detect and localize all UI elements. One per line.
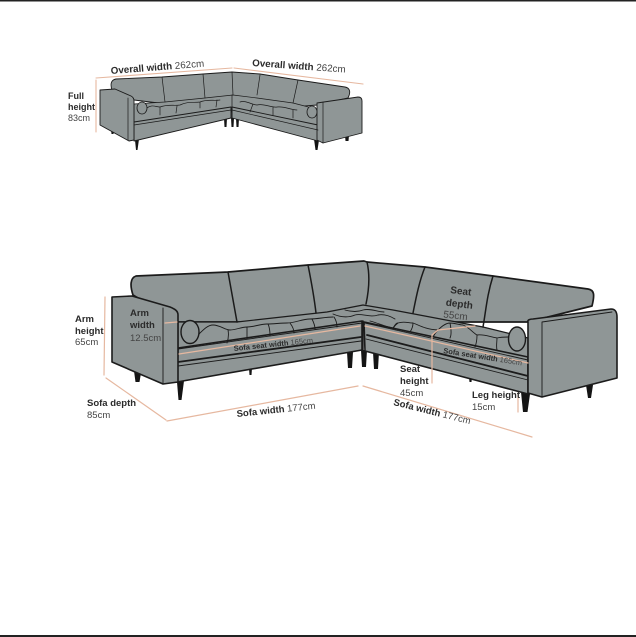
label: seat height: 45cm (400, 388, 423, 399)
label: arm height: height (75, 326, 104, 337)
small bolster right (307, 106, 317, 118)
right arm inner line (542, 312, 612, 396)
legs (111, 118, 349, 150)
left arm (100, 89, 134, 141)
label: leg height: Leg height (472, 390, 521, 401)
seat tufting (198, 309, 508, 350)
right arm (528, 309, 617, 397)
front piping and seams (178, 321, 528, 380)
label: sofa depth: Sofa depth (87, 398, 136, 409)
label: seat width left: Sofa seat width 165cm (233, 336, 313, 353)
cushion and tuft lines (128, 72, 323, 143)
label: arm width: 12.5cm (130, 333, 161, 344)
top border (0, 0, 636, 2)
back cushion seams (228, 262, 493, 327)
label: arm height: 65cm (75, 337, 98, 348)
label: overall width right: Overall width 262cm (252, 58, 346, 76)
seat cushions (178, 305, 528, 360)
label: arm height: Arm (75, 314, 94, 325)
label: arm width: Arm (130, 308, 149, 319)
small sofa width dimension right (234, 68, 363, 84)
label: seat height: height (400, 376, 429, 387)
legs (134, 350, 593, 412)
right arm (317, 97, 362, 143)
dimension: arm width (165, 322, 177, 323)
large corner sofa illustration (112, 261, 617, 412)
left arm (112, 296, 178, 384)
dimension: seat depth (432, 326, 475, 335)
label: arm width: width (129, 320, 155, 331)
front base left (177, 321, 362, 382)
label: leg height: 15cm (472, 402, 495, 413)
label: seat height: Seat (400, 364, 421, 375)
dimension: seat height (431, 335, 433, 383)
label: sofa width left: Sofa width 177cm (236, 401, 316, 420)
bottom border (0, 635, 636, 637)
front base left (134, 107, 231, 141)
label: full height: height (68, 102, 95, 112)
small corner sofa illustration (100, 72, 362, 150)
left bolster (181, 320, 199, 344)
label: sofa depth: 85cm (87, 410, 110, 421)
dimension: leg height (517, 393, 519, 412)
dimension: sofa depth (106, 378, 166, 420)
front base right (232, 107, 318, 141)
label: seat depth: depth (445, 298, 473, 312)
front base right (364, 322, 528, 394)
dimension: sofa width right (363, 386, 532, 437)
label: seat depth (443, 285, 475, 324)
seat (134, 95, 320, 132)
label: full height: 83cm (68, 113, 90, 123)
label: seat depth: Seat (450, 285, 473, 299)
label: seat width right: Sofa seat width 165cm (443, 346, 523, 367)
dimension: seat width right (365, 326, 528, 363)
back cushions (111, 72, 350, 112)
small bolster left (137, 102, 147, 114)
small sofa height dimension (95, 80, 97, 132)
right bolster (508, 327, 526, 351)
dimension: seat width left (179, 326, 360, 354)
left arm inner line (162, 308, 164, 384)
label: seat depth: 55cm (443, 309, 468, 323)
dimension: sofa width left (167, 386, 358, 421)
back cushions (131, 261, 594, 322)
label: sofa width right: Sofa width 177cm (392, 397, 472, 427)
label: overall width left: Overall width 262cm (110, 59, 205, 77)
small sofa width dimension left (96, 68, 232, 78)
dimension: arm height (104, 297, 105, 375)
label: full height: Full (68, 91, 84, 101)
